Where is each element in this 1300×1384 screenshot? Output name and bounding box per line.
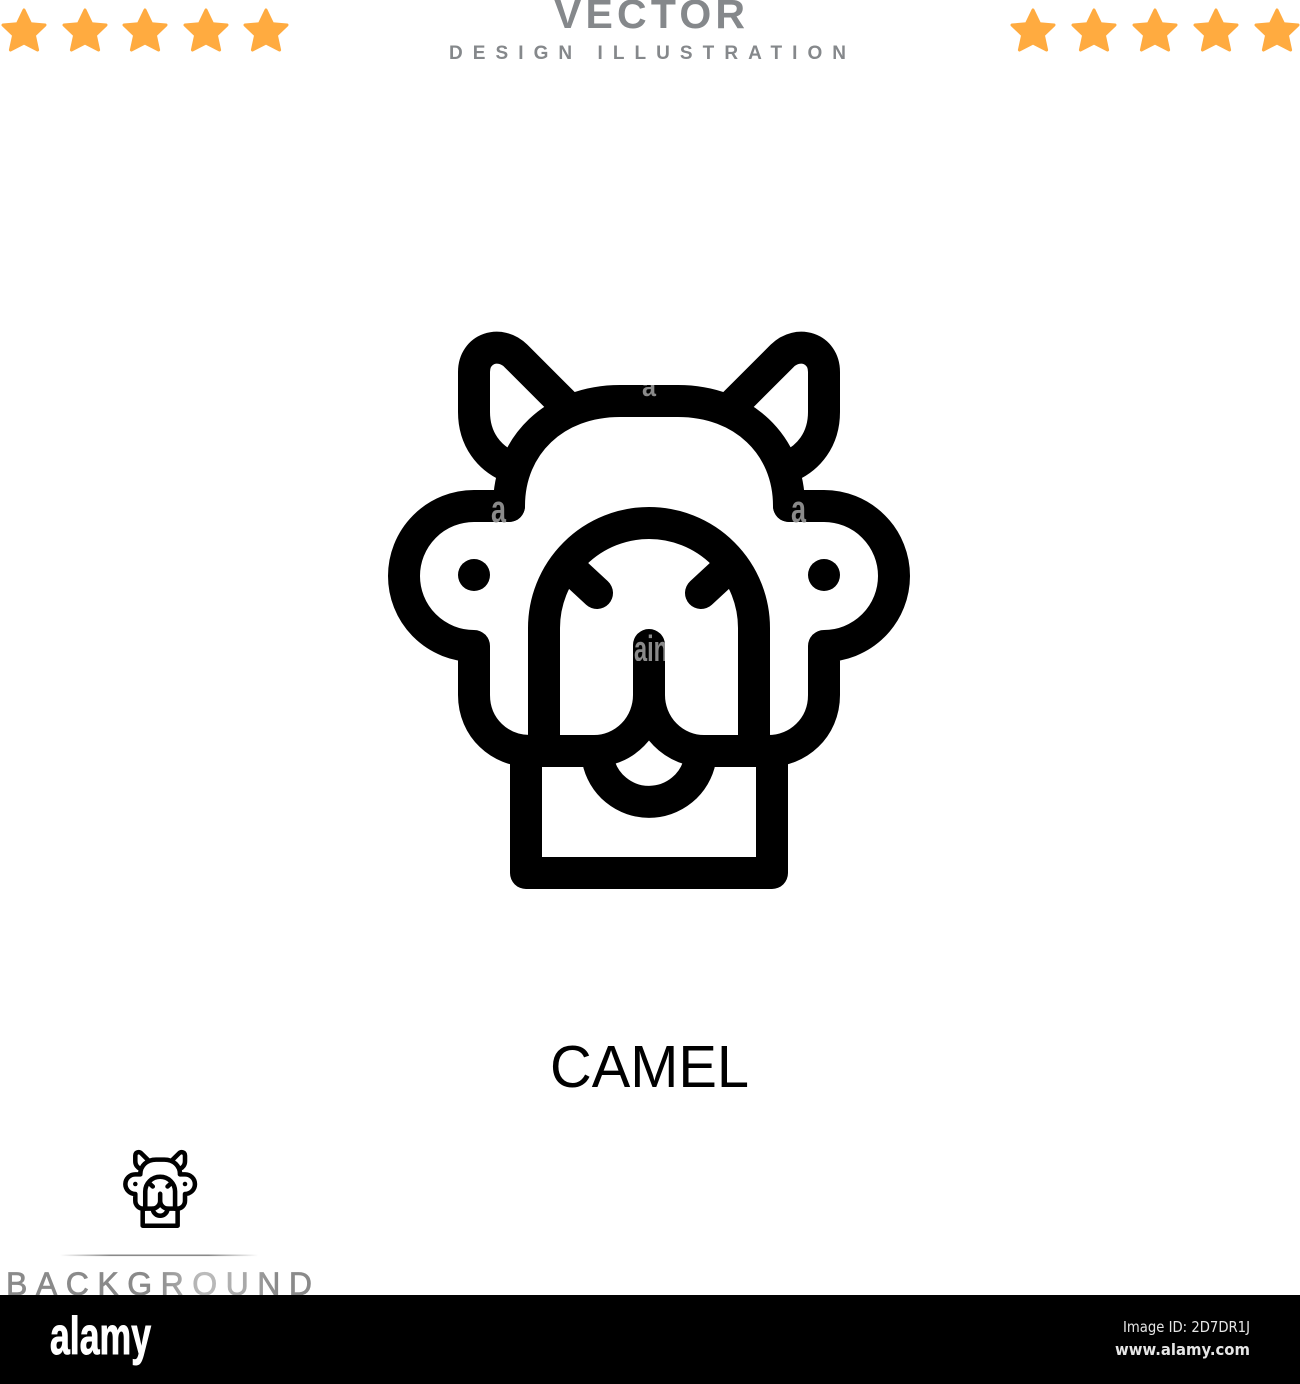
left star rating — [3, 10, 287, 50]
right star rating — [1012, 10, 1298, 50]
watermark fragments: a — [791, 489, 807, 531]
divider line — [60, 1254, 258, 1256]
watermark fragments: a — [642, 371, 656, 402]
watermark fragments: a — [491, 489, 507, 531]
icon: small camel head — [125, 1152, 195, 1226]
subheading: design illustration: DESIGN ILLUSTRATION — [449, 43, 846, 64]
footer bar — [0, 1295, 1300, 1384]
watermark fragments: ain — [634, 628, 668, 669]
website url: www.alamy.com — [1115, 1340, 1250, 1359]
title: camel: CAMEL — [550, 1034, 749, 1100]
logo: alamy: alamy — [50, 1307, 151, 1366]
watermark fragments — [491, 371, 807, 669]
label: background: BACKGROUND — [6, 1266, 312, 1302]
image id: Image ID: 2D7DR1J — [1123, 1318, 1250, 1336]
icon: camel head — [404, 348, 894, 873]
